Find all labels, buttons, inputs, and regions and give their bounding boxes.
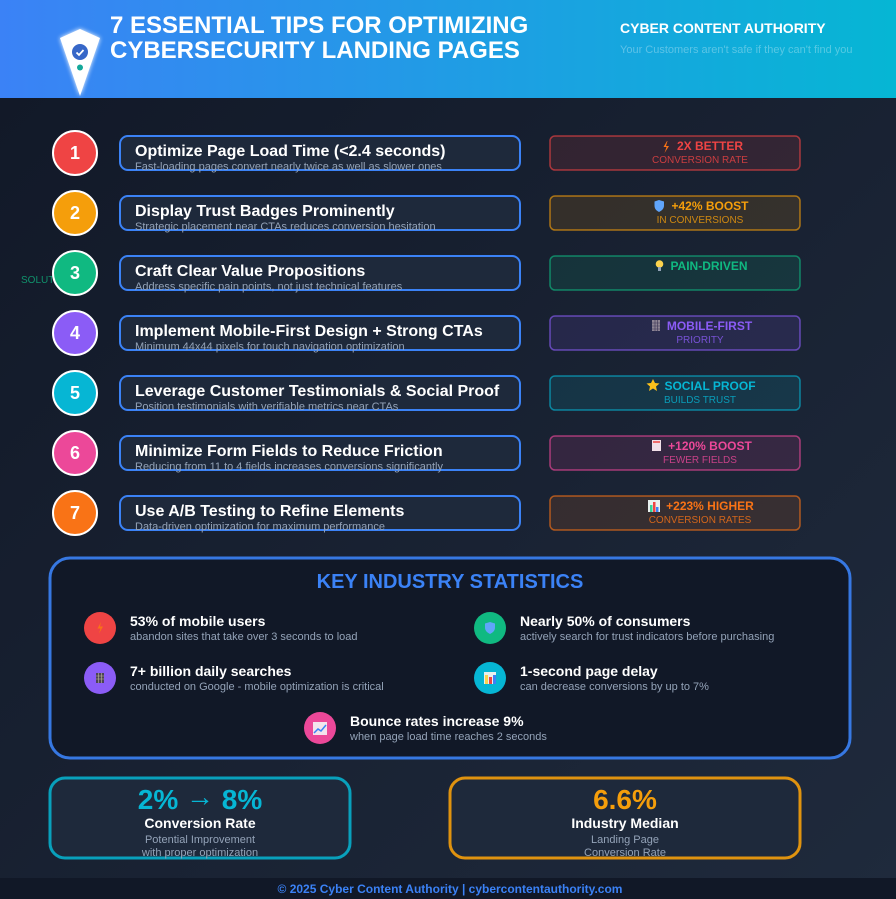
stat: page delay: 1-second page delay	[520, 663, 658, 679]
tip 7 text box: Data-driven optimization for maximum performance	[135, 521, 385, 533]
tip 5 text box	[120, 376, 520, 413]
number badge 2: 2	[70, 203, 80, 223]
callout: conversion rate: →	[186, 781, 214, 812]
tip 1 text box: Fast-loading pages convert nearly twice as well as slower ones	[135, 161, 442, 173]
callout: conversion rate: 8%	[214, 784, 262, 815]
tip 5 metric badge: BUILDS TRUST	[664, 395, 736, 406]
number badge 4: 4	[70, 323, 80, 343]
tip 7 metric badge: +223% HIGHER	[666, 499, 754, 513]
stat: daily searches	[84, 662, 384, 694]
title: 7 ESSENTIAL TIPS FOR OPTIMIZING	[110, 12, 528, 39]
callout: conversion rate: Potential Improvement	[145, 834, 255, 846]
tip 3 metric badge	[550, 256, 800, 290]
tip 1 text box: Optimize Page Load Time (<2.4 seconds)	[135, 143, 445, 160]
tip 7 text box	[120, 496, 520, 533]
panel: key industry statistics	[50, 558, 850, 758]
tip 1 metric badge	[550, 136, 800, 170]
tip 4	[53, 311, 800, 355]
callout: conversion rate: 2%	[138, 784, 178, 815]
tip 3 text box: Address specific pain points, not just technical features	[135, 281, 403, 293]
tip 6 text box: Minimize Form Fields to Reduce Friction	[135, 443, 443, 460]
tip 5 metric badge: SOCIAL PROOF	[664, 379, 756, 393]
tip 2 text box: Display Trust Badges Prominently	[135, 203, 395, 220]
callout: conversion rate: with proper optimization	[141, 847, 258, 859]
tip 1 text box	[120, 136, 520, 173]
header band	[0, 0, 896, 98]
callout: industry median	[450, 778, 800, 859]
tip 6 text box: Reducing from 11 to 4 fields increases conversions significantly	[135, 461, 443, 473]
tip 7 text box: Use A/B Testing to Refine Elements	[135, 503, 404, 520]
number badge 1	[53, 131, 97, 175]
number badge 5	[53, 371, 97, 415]
tip 2 metric badge	[550, 196, 800, 230]
callout: industry median: 6.6%	[593, 784, 657, 815]
stat: daily searches: conducted on Google - mobile optimization is critical	[130, 681, 384, 693]
side label: solution: SOLUTION	[21, 275, 72, 286]
tip 5 metric badge	[550, 376, 800, 410]
brand tagline: Your Customers aren't safe if they can't find you	[620, 44, 852, 56]
number badge 7: 7	[70, 503, 80, 523]
callout: conversion rate: Conversion Rate	[144, 815, 256, 831]
stat: page delay	[474, 662, 709, 694]
stat: bounce rates: when page load time reaches 2 seconds	[349, 731, 547, 743]
statistics heading: KEY INDUSTRY STATISTICS	[317, 571, 583, 593]
tip 5	[53, 371, 800, 415]
number badge 6	[53, 431, 97, 475]
stat: daily searches: 7+ billion daily searches	[130, 663, 292, 679]
tip 2 text box: Strategic placement near CTAs reduces conversion hesitation	[135, 221, 436, 233]
tip 4 metric badge: MOBILE-FIRST	[667, 319, 753, 333]
tip 6 metric badge: +120% BOOST	[668, 439, 753, 453]
number badge 2	[53, 191, 97, 235]
number badge 1: 1	[70, 143, 80, 163]
stat: mobile users	[84, 612, 358, 644]
stat: mobile users: abandon sites that take over 3 seconds to load	[130, 631, 358, 643]
icon: shield logo	[60, 29, 100, 96]
number badge 3	[53, 251, 97, 295]
tip 6 text box	[120, 436, 520, 473]
tip 1 metric badge: CONVERSION RATE	[652, 155, 748, 166]
tip 2 text box	[120, 196, 520, 233]
callout: industry median: Industry Median	[571, 815, 679, 831]
tip 3	[53, 251, 800, 295]
tip 5 text box: Position testimonials with verifiable metrics near CTAs	[135, 401, 399, 413]
stat: bounce rates	[304, 712, 547, 744]
tip 7 metric badge	[550, 496, 800, 530]
number badge 6: 6	[70, 443, 80, 463]
tip 2	[53, 191, 800, 235]
tip 1	[53, 131, 800, 175]
tip 4 metric badge: PRIORITY	[676, 335, 724, 346]
title: CYBERSECURITY LANDING PAGES	[110, 37, 520, 64]
stat: mobile users: 53% of mobile users	[130, 613, 266, 629]
number badge 3: 3	[70, 263, 80, 283]
tip 4 metric badge	[550, 316, 800, 350]
number badge 7	[53, 491, 97, 535]
tip 4 text box: Implement Mobile-First Design + Strong CTAs	[135, 323, 483, 340]
tip 4 text box	[120, 316, 520, 353]
tip 7 metric badge: CONVERSION RATES	[649, 515, 752, 526]
stat: consumers: Nearly 50% of consumers	[520, 613, 691, 629]
callout: industry median: Landing Page	[591, 834, 659, 846]
tip 6	[53, 431, 800, 475]
brand name: CYBER CONTENT AUTHORITY	[620, 20, 826, 36]
stat: consumers	[474, 612, 774, 644]
tip 5 text box: Leverage Customer Testimonials & Social Proof	[135, 383, 500, 400]
stat: page delay: can decrease conversions by up to 7%	[520, 681, 709, 693]
number badge 5: 5	[70, 383, 80, 403]
footer: © 2025 Cyber Content Authority | cybercontentauthority.com	[278, 882, 622, 896]
tip 1 metric badge: 2X BETTER	[677, 139, 743, 153]
tip 2 metric badge: +42% BOOST	[671, 199, 749, 213]
tip 3 metric badge: PAIN-DRIVEN	[670, 259, 748, 273]
tip 6 metric badge	[550, 436, 800, 470]
stat: bounce rates: Bounce rates increase 9%	[350, 713, 524, 729]
tip 6 metric badge: FEWER FIELDS	[663, 455, 737, 466]
tip 2 metric badge: IN CONVERSIONS	[657, 215, 744, 226]
tip 3 text box: Craft Clear Value Propositions	[135, 263, 365, 280]
tip 7	[53, 491, 800, 535]
callout: industry median: Conversion Rate	[584, 847, 666, 859]
stat: consumers: actively search for trust indicators before purchasing	[520, 631, 774, 643]
tip 4 text box: Minimum 44x44 pixels for touch navigation optimization	[135, 341, 405, 353]
footer	[0, 878, 896, 899]
callout: conversion rate	[50, 778, 350, 859]
tip 3 text box	[120, 256, 520, 293]
number badge 4	[53, 311, 97, 355]
